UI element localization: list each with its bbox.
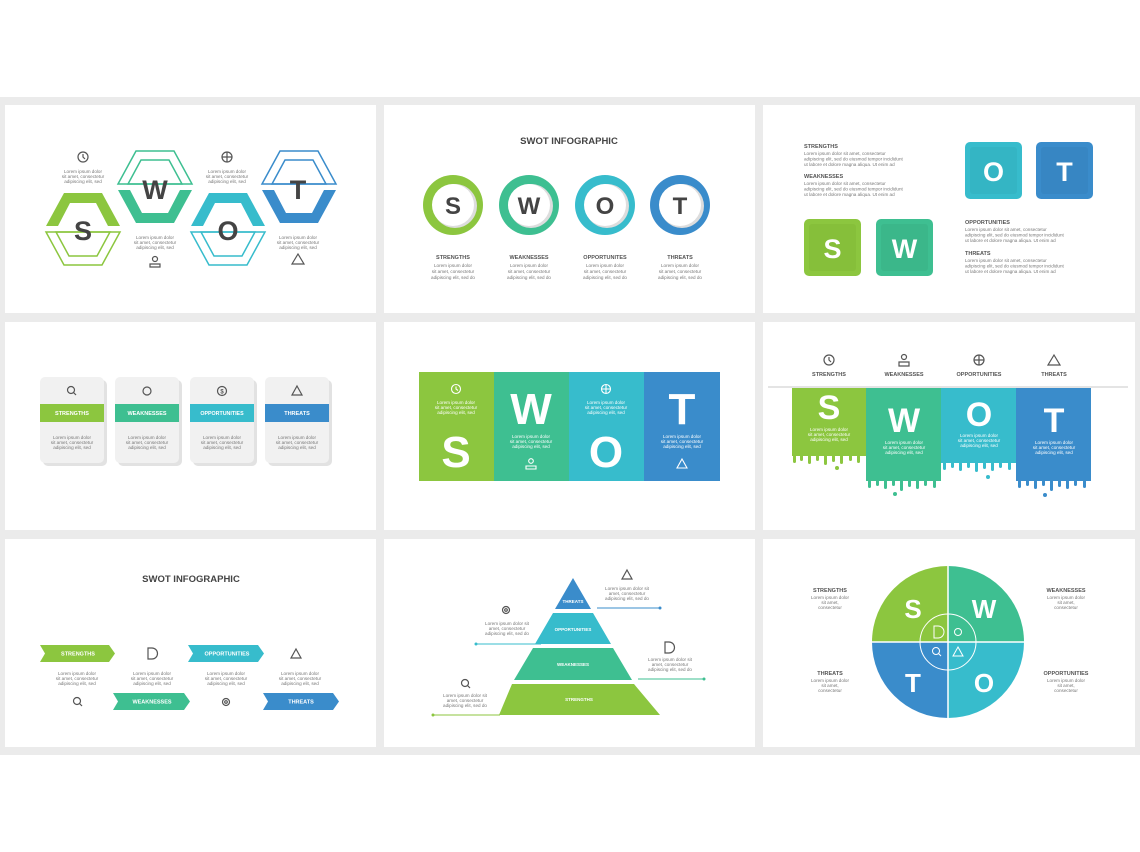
label weaknesses: consectetur xyxy=(1054,605,1078,610)
text: opportunities threats xyxy=(965,220,1065,274)
card threats: Lorem ipsum dolor xyxy=(278,435,316,440)
card strengths xyxy=(40,377,107,466)
square O: O xyxy=(983,157,1004,187)
pyramid texts: amet, consectetur xyxy=(447,698,484,703)
column T: adipiscing elit, sed xyxy=(663,444,701,449)
pyramid texts: Lorem ipsum dolor sit xyxy=(485,621,530,626)
text: opportunities threats: ut labore et dolore magna aliqua. Ut enim ad xyxy=(965,238,1056,243)
header icons and labels: WEAKNESSES xyxy=(884,372,924,378)
drip W: Lorem ipsum dolor xyxy=(885,440,923,445)
card opportunities: OPPORTUNITIES xyxy=(200,411,244,417)
icon: globe xyxy=(222,152,232,162)
pyramid texts: amet, consectetur xyxy=(652,662,689,667)
labels: Lorem ipsum dolor xyxy=(510,263,548,268)
column O: adipiscing elit, sed xyxy=(587,410,625,415)
square T: T xyxy=(1056,157,1073,187)
text: T xyxy=(277,235,320,250)
texts: adipiscing elit, sed xyxy=(207,681,245,686)
text: T: sit amet, consectetur xyxy=(277,240,320,245)
square S: S xyxy=(823,234,842,264)
labels: STRENGTHS xyxy=(436,255,470,261)
pyramid texts xyxy=(443,586,693,708)
labels: adipiscing elit, sed do xyxy=(658,275,702,280)
column W: W xyxy=(510,385,552,434)
card opportunities: Lorem ipsum dolor xyxy=(203,435,241,440)
label threats: consectetur xyxy=(818,688,842,693)
tag strengths: STRENGTHS xyxy=(61,652,95,658)
pyramid texts: Lorem ipsum dolor sit xyxy=(443,693,488,698)
card strengths: STRENGTHS xyxy=(55,411,89,417)
tag weaknesses xyxy=(113,693,190,710)
circle O: O xyxy=(596,193,614,220)
label strengths: consectetur xyxy=(818,605,842,610)
texts: adipiscing elit, sed xyxy=(281,681,319,686)
icon: warning xyxy=(292,254,304,264)
pyramid texts: amet, consectetur xyxy=(489,626,526,631)
header icons and labels xyxy=(812,354,1067,378)
text: W: adipiscing elit, sed xyxy=(136,245,174,250)
title: SWOT INFOGRAPHIC xyxy=(142,574,240,585)
card threats: sit amet, consectetur xyxy=(276,440,319,445)
connector lines xyxy=(432,606,706,716)
quadrant circle: T xyxy=(905,668,921,698)
panel: circle SWOT xyxy=(763,539,1135,747)
header icons and labels: OPPORTUNITIES xyxy=(957,372,1002,378)
pyramid layers: STRENGTHS xyxy=(565,697,593,702)
label strengths: sit amet, xyxy=(821,600,839,605)
texts: adipiscing elit, sed xyxy=(133,681,171,686)
text: opportunities threats: Lorem ipsum dolor sit amet, consectetur xyxy=(965,258,1047,263)
pyramid layers xyxy=(499,578,660,715)
text: strengths weaknesses: adipiscing elit, sed do eiusmod tempor incididunt xyxy=(804,156,904,162)
text: S: sit amet, consectetur xyxy=(62,174,105,179)
header icons and labels: THREATS xyxy=(1041,372,1067,378)
drip O: adipiscing elit, sed xyxy=(960,443,998,448)
column O xyxy=(569,372,644,481)
column O: Lorem ipsum dolor xyxy=(587,400,625,405)
label weaknesses: WEAKNESSES xyxy=(1046,588,1086,594)
header icons and labels: STRENGTHS xyxy=(812,372,846,378)
circle O xyxy=(575,175,635,235)
quadrant circle: S xyxy=(904,594,922,624)
texts: sit amet, consectetur xyxy=(56,676,99,681)
card strengths: sit amet, consectetur xyxy=(51,440,94,445)
labels: Lorem ipsum dolor xyxy=(434,263,472,268)
labels xyxy=(431,255,702,280)
column S: S xyxy=(441,428,471,477)
labels: Lorem ipsum dolor xyxy=(661,263,699,268)
card threats xyxy=(265,377,332,466)
card weaknesses: adipiscing elit, sed xyxy=(128,445,166,450)
card weaknesses xyxy=(115,377,182,466)
square S xyxy=(804,219,861,276)
panel: block SWOT xyxy=(384,322,755,530)
text: S: adipiscing elit, sed xyxy=(64,179,102,184)
labels: sit amet, consectetur xyxy=(659,269,702,274)
circle W xyxy=(499,175,559,235)
texts: sit amet, consectetur xyxy=(131,676,174,681)
label threats: sit amet, xyxy=(821,683,839,688)
card weaknesses: Lorem ipsum dolor xyxy=(128,435,166,440)
hexagon S: S xyxy=(74,216,92,246)
text: O: sit amet, consectetur xyxy=(206,174,249,179)
tag strengths xyxy=(40,645,115,662)
text: strengths weaknesses: adipiscing elit, sed do eiusmod tempor incididunt xyxy=(804,186,904,192)
icons xyxy=(74,648,301,706)
text: S xyxy=(62,169,105,184)
texts: Lorem ipsum dolor xyxy=(133,671,171,676)
labels: sit amet, consectetur xyxy=(584,269,627,274)
hexagon S xyxy=(46,193,120,265)
tag threats: THREATS xyxy=(288,700,314,706)
hexagon T: T xyxy=(290,175,307,205)
pyramid texts: adipiscing elit, sed do xyxy=(648,667,692,672)
card weaknesses: WEAKNESSES xyxy=(127,411,167,417)
text: W: Lorem ipsum dolor xyxy=(136,235,174,240)
circle T xyxy=(650,175,710,235)
column W xyxy=(494,372,569,481)
circle S xyxy=(423,175,483,235)
text: strengths weaknesses: Lorem ipsum dolor sit amet, consectetur xyxy=(804,151,886,156)
column S: adipiscing elit, sed xyxy=(437,410,475,415)
label threats: Lorem ipsum dolor xyxy=(811,678,849,683)
label opportunities: Lorem ipsum dolor xyxy=(1047,678,1085,683)
background band xyxy=(0,97,1140,755)
text: O: Lorem ipsum dolor xyxy=(208,169,246,174)
text: S: Lorem ipsum dolor xyxy=(64,169,102,174)
texts: sit amet, consectetur xyxy=(205,676,248,681)
circle S: S xyxy=(445,193,461,220)
quadrant circle xyxy=(872,566,1024,718)
text: strengths weaknesses: WEAKNESSES xyxy=(804,174,843,180)
label strengths xyxy=(811,588,849,610)
panel: squares SWOT xyxy=(763,105,1135,313)
quadrant circle: O xyxy=(974,668,994,698)
text: W: sit amet, consectetur xyxy=(134,240,177,245)
hexagon T xyxy=(262,151,336,223)
pyramid layers: WEAKNESSES xyxy=(557,662,589,667)
text: O: adipiscing elit, sed xyxy=(208,179,246,184)
column O: O xyxy=(589,428,623,477)
column T: sit amet, consectetur xyxy=(661,439,704,444)
labels: OPPORTUNITES xyxy=(583,255,627,261)
label weaknesses: sit amet, xyxy=(1057,600,1075,605)
panel: pyramid SWOT xyxy=(384,539,755,747)
card threats: adipiscing elit, sed xyxy=(278,445,316,450)
pyramid texts: amet, consectetur xyxy=(609,591,646,596)
card opportunities: sit amet, consectetur xyxy=(201,440,244,445)
text: T: adipiscing elit, sed xyxy=(279,245,317,250)
text: W xyxy=(134,235,177,250)
texts: sit amet, consectetur xyxy=(279,676,322,681)
label opportunities: consectetur xyxy=(1054,688,1078,693)
drip O xyxy=(941,388,1016,479)
text: opportunities threats: adipiscing elit, sed do eiusmod tempor incididunt xyxy=(965,264,1065,268)
card strengths: adipiscing elit, sed xyxy=(53,445,91,450)
text: T: Lorem ipsum dolor xyxy=(279,235,317,240)
drip W xyxy=(866,388,941,496)
texts: adipiscing elit, sed xyxy=(58,681,96,686)
pyramid texts: adipiscing elit, sed do xyxy=(443,703,487,708)
labels: sit amet, consectetur xyxy=(508,269,551,274)
drip O: O xyxy=(966,396,992,434)
drip W: adipiscing elit, sed xyxy=(885,450,923,455)
label strengths: STRENGTHS xyxy=(813,588,847,594)
card opportunities: adipiscing elit, sed xyxy=(203,445,241,450)
text: opportunities threats: THREATS xyxy=(965,251,991,257)
labels: adipiscing elit, sed do xyxy=(507,275,551,280)
labels: WEAKNESSES xyxy=(509,255,549,261)
panel: drip SWOT xyxy=(763,322,1135,530)
column W: sit amet, consectetur xyxy=(510,439,553,444)
tag weaknesses: WEAKNESSES xyxy=(132,700,172,706)
circle T: T xyxy=(673,193,688,220)
column S: Lorem ipsum dolor xyxy=(437,400,475,405)
panel: cards SWOT xyxy=(5,322,376,530)
texts: Lorem ipsum dolor xyxy=(58,671,96,676)
panel: arrows SWOT xyxy=(5,539,376,747)
icon: clock xyxy=(78,152,88,162)
hexagon O xyxy=(191,193,265,265)
column S: sit amet, consectetur xyxy=(435,405,478,410)
text: strengths weaknesses xyxy=(804,144,904,197)
text: strengths weaknesses: ut labore et dolore magna aliqua. Ut enim ad xyxy=(804,162,895,167)
square W: W xyxy=(892,234,918,264)
drip S: Lorem ipsum dolor xyxy=(810,427,848,432)
drip W: W xyxy=(888,402,921,440)
drip S: S xyxy=(818,389,840,427)
tag opportunities xyxy=(188,645,264,662)
pyramid texts: adipiscing elit, sed do xyxy=(605,596,649,601)
text: strengths weaknesses: STRENGTHS xyxy=(804,144,838,150)
column W: adipiscing elit, sed xyxy=(512,444,550,449)
quadrant circle: W xyxy=(972,594,997,624)
label opportunities: OPPORTUNITIES xyxy=(1044,671,1089,677)
texts: Lorem ipsum dolor xyxy=(207,671,245,676)
drip T: Lorem ipsum dolor xyxy=(1035,440,1073,445)
text: O xyxy=(206,169,249,184)
texts xyxy=(56,671,322,686)
label threats xyxy=(811,671,849,693)
card opportunities xyxy=(190,377,257,466)
pyramid texts: Lorem ipsum dolor sit xyxy=(648,657,693,662)
labels: adipiscing elit, sed do xyxy=(583,275,627,280)
hexagon W: W xyxy=(142,175,168,205)
drip T: adipiscing elit, sed xyxy=(1035,450,1073,455)
tag threats xyxy=(263,693,339,710)
text: opportunities threats: adipiscing elit, sed do eiusmod tempor incididunt xyxy=(965,232,1065,238)
label weaknesses xyxy=(1046,588,1086,610)
drip T: sit amet, consectetur xyxy=(1033,445,1076,450)
drip O: sit amet, consectetur xyxy=(958,438,1001,443)
text: strengths weaknesses: ut labore et dolore magna aliqua. Ut enim ad xyxy=(804,192,895,197)
card threats: THREATS xyxy=(284,411,310,417)
label weaknesses: Lorem ipsum dolor xyxy=(1047,595,1085,600)
panel: circles SWOT xyxy=(384,105,755,313)
label threats: THREATS xyxy=(817,671,843,677)
texts: Lorem ipsum dolor xyxy=(281,671,319,676)
icon: user xyxy=(150,256,160,267)
column T xyxy=(644,372,720,481)
label opportunities: sit amet, xyxy=(1057,683,1075,688)
pyramid texts: adipiscing elit, sed do xyxy=(485,631,529,636)
drip T: T xyxy=(1044,402,1065,440)
labels: Lorem ipsum dolor xyxy=(586,263,624,268)
labels: THREATS xyxy=(667,255,693,261)
drip T xyxy=(1016,388,1091,497)
hexagon O: O xyxy=(217,216,239,246)
drip O: Lorem ipsum dolor xyxy=(960,433,998,438)
hexagon W xyxy=(118,151,192,223)
drip S: adipiscing elit, sed xyxy=(810,437,848,442)
card strengths: Lorem ipsum dolor xyxy=(53,435,91,440)
panel: hexagon SWOT xyxy=(5,105,376,313)
label strengths: Lorem ipsum dolor xyxy=(811,595,849,600)
labels: sit amet, consectetur xyxy=(432,269,475,274)
column T: Lorem ipsum dolor xyxy=(663,434,701,439)
text: opportunities threats: OPPORTUNITIES xyxy=(965,220,1010,226)
pyramid layers: OPPORTUNITIES xyxy=(555,627,591,632)
text: opportunities threats: Lorem ipsum dolor sit amet, consectetur xyxy=(965,227,1047,232)
labels: adipiscing elit, sed do xyxy=(431,275,475,280)
title: SWOT INFOGRAPHIC xyxy=(520,136,618,147)
pyramid icons xyxy=(462,570,674,688)
card opportunities: $ xyxy=(220,390,224,396)
drip S: sit amet, consectetur xyxy=(808,432,851,437)
label opportunities xyxy=(1044,671,1089,693)
drip W: sit amet, consectetur xyxy=(883,445,926,450)
column O: sit amet, consectetur xyxy=(585,405,628,410)
pyramid texts: Lorem ipsum dolor sit xyxy=(605,586,650,591)
square W xyxy=(876,219,933,276)
card weaknesses: sit amet, consectetur xyxy=(126,440,169,445)
column W: Lorem ipsum dolor xyxy=(512,434,550,439)
square T xyxy=(1036,142,1093,199)
square O xyxy=(965,142,1022,199)
circle W: W xyxy=(518,193,541,220)
column T: T xyxy=(669,385,696,434)
tag opportunities: OPPORTUNITIES xyxy=(205,652,250,658)
text: opportunities threats: ut labore et dolore magna aliqua. Ut enim ad xyxy=(965,269,1056,274)
pyramid layers: THREATS xyxy=(563,599,583,604)
column S xyxy=(419,372,494,481)
text: strengths weaknesses: Lorem ipsum dolor sit amet, consectetur xyxy=(804,181,886,186)
drip S xyxy=(792,388,866,470)
